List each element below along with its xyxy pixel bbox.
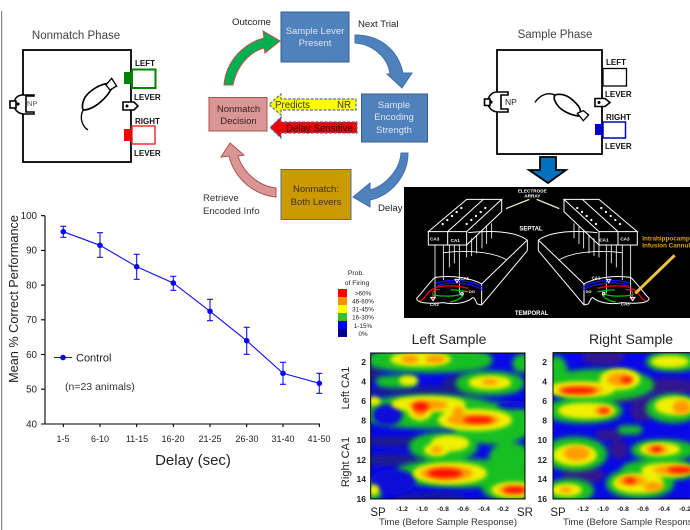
icon: nose poke receptacle: NP [505,97,517,107]
y ticks and labels [357,357,366,504]
cannula [635,255,675,293]
x tick labels: 16-20 [161,434,185,444]
x ticks: -0.8 [437,506,449,513]
array labels: CA1 [451,238,460,243]
array labels: CA3 [620,237,630,242]
right lever [124,117,161,158]
y ticks and labels: 10 [538,435,547,445]
legend: probability of firing: 1-15% [354,323,373,330]
channel label: Left CA1: Left CA1 [340,367,352,409]
icon: house light [595,98,610,106]
y ticks and labels: 8 [361,416,366,426]
panel: electrode array diagram [404,187,690,318]
heatmap: right sample [538,331,690,528]
arrow: next trial [355,35,412,88]
y ticks and labels: 14 [357,474,366,484]
x ticks: -0.8 [617,506,629,513]
legend: control [54,352,111,364]
box: Nonmatch Decision [209,98,267,131]
arrow: predicts NR [269,94,356,115]
left lever [124,59,161,102]
x ticks: -1.0 [597,506,609,513]
heading: Right Sample: Right Sample [589,331,673,347]
array labels: CA3 [430,237,440,242]
cannula label [642,235,690,250]
right lever: RIGHT [135,117,160,126]
label: Retrieve Encoded Info [203,193,260,217]
legend: probability of firing: 16-30% [352,314,374,322]
left lever: LEFT [135,59,155,68]
chamber box [23,50,131,162]
icon: house light [123,102,138,110]
box: Sample Encoding Strength: Strength [376,125,412,136]
arrow: predicts NR: Predicts [275,100,310,111]
box: Nonmatch Both Levers: Both Levers [291,197,342,208]
left array [417,199,527,305]
left lever: LEVER [605,90,632,99]
y ticks and labels: 10 [357,435,366,445]
y ticks and labels: 6 [542,396,547,406]
y ticks and labels: 2 [361,357,366,367]
electrode array pointers [506,199,559,209]
y ticks and labels: 4 [542,376,547,386]
label: Retrieve Encoded Info: Retrieve [203,193,239,204]
legend: probability of firing: 0% [358,331,368,338]
icon: nose poke receptacle [10,95,37,114]
box: Sample Lever Present: Sample Lever [286,26,344,37]
label: Delay: Delay [378,203,403,214]
box: Nonmatch Decision: Nonmatch [217,104,260,115]
panel: nonmatch phase [10,30,161,162]
legend: control: Control [76,352,111,364]
array labels: DG [469,289,475,294]
page border line [1,11,2,530]
control series [60,226,322,393]
icon: nose poke receptacle [484,92,517,112]
x ticks: -0.4 [658,506,670,513]
y ticks and labels: 6 [361,396,366,406]
x ticks: -0.6 [637,506,649,513]
chart: performance by delay [7,211,331,469]
y tick labels: 40 [26,419,38,430]
y axis title: Mean % Correct Performance [7,215,21,383]
heading: Nonmatch Phase: Nonmatch Phase [32,30,120,42]
x tick labels [56,434,331,444]
left lever: LEVER [134,93,161,102]
box: Nonmatch Decision: Decision [220,116,257,127]
chamber box [497,50,602,154]
label: SP: SP [370,507,386,519]
x ticks: -0.6 [457,506,469,513]
array labels: ELECTRODE [518,189,547,194]
array labels: CA3 [621,301,630,306]
right lever: RIGHT [606,113,631,122]
x axis title: Delay (sec) [155,452,231,469]
y ticks and labels: 12 [357,455,366,465]
panel: sample phase [484,29,632,154]
channel label: Right CA1: Right CA1 [340,437,352,487]
icon: nose poke receptacle: NP [27,99,37,108]
icon: rat [535,94,589,121]
x ticks: -1.2 [396,506,408,513]
axes [41,216,320,427]
array labels: DG [586,289,592,294]
y ticks and labels: 16 [357,494,366,504]
y ticks and labels: 12 [538,455,547,465]
left lever: LEFT [606,58,626,67]
x tick labels: 6-10 [91,434,109,444]
y ticks and labels: 8 [542,416,547,426]
x tick labels: 1-5 [56,434,70,444]
y tick labels [21,211,38,430]
arrow: retrieve [221,143,276,197]
x tick labels: 31-40 [271,434,295,444]
legend: probability of firing: 46-60% [352,298,374,306]
box: Nonmatch Both Levers [281,170,351,220]
arrow: predicts NR: NR [337,100,351,111]
arrow: delay sensitive [270,117,357,138]
label: SR: SR [517,507,533,519]
legend: probability of firing: 31-45% [352,306,374,314]
legend: probability of firing: of Firing [345,280,369,287]
array labels: CA1 [599,237,609,242]
x axis title: Time (Before Sample Response) [379,517,517,528]
arrow: delay sensitive: Delay Sensitive [286,124,353,134]
right lever [595,113,632,151]
box: Sample Encoding Strength [362,94,428,142]
box: Sample Lever Present [281,12,349,62]
right array [538,199,649,305]
box: Sample Lever Present: Present [299,38,332,49]
box: Sample Encoding Strength: Sample [378,100,410,111]
x ticks: -1.0 [416,506,428,513]
arrow: outcome [224,31,280,85]
y tick labels: 70 [26,315,38,326]
x tick labels: 26-30 [235,434,259,444]
y tick labels: 100 [21,211,38,222]
array labels: TEMPORAL [515,311,549,317]
y tick labels: 50 [26,384,38,396]
x tick labels: 11-15 [126,434,148,444]
legend: probability of firing [338,270,374,338]
x tick labels: 41-50 [307,434,331,444]
note: sample size: (n=23 animals) [65,381,135,393]
label: Next Trial: Next Trial [358,19,399,30]
label: Retrieve Encoded Info: Encoded Info [203,206,260,217]
legend: probability of firing: >60% [355,290,372,298]
y ticks and labels [538,357,547,504]
y tick labels: 60 [26,350,38,361]
right lever: LEVER [605,142,632,151]
array labels: CA1 [592,275,601,280]
x ticks: -1.2 [577,506,589,513]
electrode contacts [441,207,621,225]
y ticks and labels: 16 [538,494,547,504]
array labels [430,189,630,317]
heading: Left Sample: Left Sample [412,331,487,347]
y tick labels: 80 [26,280,38,291]
legend: probability of firing: Prob. [348,270,364,277]
panel: task flow cycle [203,12,428,220]
icon: rat [81,78,117,130]
array labels: SEPTAL [519,227,543,233]
array labels: CA3 [430,302,439,307]
x ticks: -0.2 [497,506,509,513]
label: SP: SP [550,507,566,519]
x ticks [396,506,509,513]
x tick labels: 21-25 [198,434,222,444]
box: Nonmatch Both Levers: Nonmatch: [293,184,339,195]
label: Outcome: Outcome [232,17,271,28]
array labels: ARRAY [524,193,541,198]
y ticks and labels: 14 [538,474,547,484]
y ticks and labels: 2 [542,357,547,367]
arrow: delay [353,153,408,207]
y ticks and labels: 4 [361,376,366,386]
x ticks: -0.4 [478,506,490,513]
box: Sample Encoding Strength: Encoding [374,112,414,123]
heading: Sample Phase: Sample Phase [518,29,592,41]
x ticks [577,506,690,513]
arrow: sample phase to electrode array [529,157,566,183]
right lever: LEVER [134,149,161,158]
y tick labels: 90 [26,246,38,257]
heatmap: left sample [340,331,537,528]
left lever [603,58,632,99]
array labels: CA1 [460,276,470,281]
